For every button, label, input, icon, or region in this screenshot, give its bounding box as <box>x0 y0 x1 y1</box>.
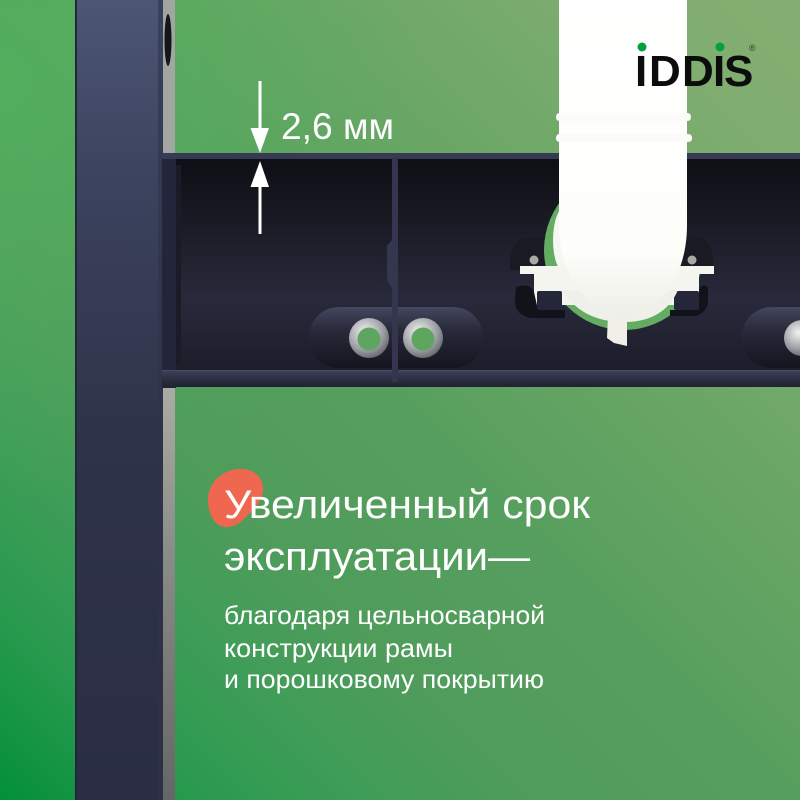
frame: horizontal beam <box>162 153 800 388</box>
frame: vertical post <box>75 0 175 800</box>
white drain pipe <box>556 0 692 315</box>
supporting text: благодаря цельносварной <box>224 600 545 630</box>
supporting text: конструкции рамы <box>224 633 453 663</box>
coral accent blob <box>208 469 263 527</box>
supporting text <box>224 600 545 694</box>
right mounting plate <box>741 307 800 368</box>
heading: эксплуатации— <box>224 535 530 579</box>
mounting plate with nuts <box>309 307 483 368</box>
logo: IDDIS: ® <box>749 43 756 53</box>
beam divider <box>387 158 398 382</box>
thickness dimension arrows <box>250 81 269 234</box>
heading: Увеличенный срок <box>224 483 591 527</box>
dimension label: 2,6 мм <box>281 106 394 147</box>
logo: IDDIS: IDDIS <box>635 47 753 96</box>
pipe bracket with rubber mounts <box>510 204 714 346</box>
supporting text: и порошковому покрытию <box>224 664 544 694</box>
heading <box>224 483 591 579</box>
